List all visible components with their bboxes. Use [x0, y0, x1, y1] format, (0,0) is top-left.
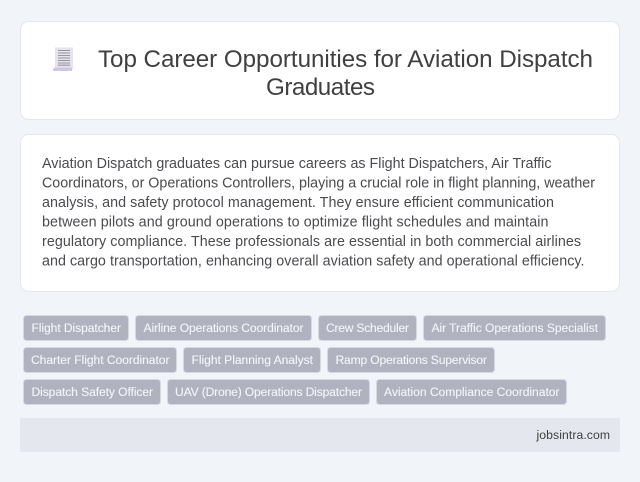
description text: between pilots and ground operations to optimize flight schedules and maintain	[42, 214, 549, 230]
title heading: Top Career Opportunities for Aviation Dispatch	[98, 46, 593, 73]
tag: Dispatch Safety Officer	[24, 380, 160, 404]
icon: document scroll	[53, 48, 73, 71]
tag: Airline Operations Coordinator	[136, 316, 312, 340]
tag: Flight Dispatcher: Flight Dispatcher	[32, 321, 121, 335]
description text: Coordinators, or Operations Controllers, playing a crucial role in flight planning, weather	[42, 176, 595, 192]
tag: Air Traffic Operations Specialist	[424, 316, 606, 340]
description text: Aviation Dispatch graduates can pursue careers as Flight Dispatchers, Air Traffic	[42, 156, 552, 172]
tag: Aviation Compliance Coordinator	[376, 380, 566, 404]
description text: regulatory compliance. These professionals are essential in both commercial airlines	[42, 234, 581, 250]
tag: Crew Scheduler: Crew Scheduler	[326, 321, 409, 335]
title heading: Graduates	[266, 74, 375, 101]
tag: Air Traffic Operations Specialist: Air Traffic Operations Specialist	[432, 321, 599, 335]
tag: Charter Flight Coordinator	[24, 348, 176, 372]
tag: UAV (Drone) Operations Dispatcher: UAV (Drone) Operations Dispatcher	[175, 385, 362, 399]
tag: Crew Scheduler	[318, 316, 416, 340]
tag: UAV (Drone) Operations Dispatcher	[168, 380, 370, 404]
tag: Airline Operations Coordinator: Airline Operations Coordinator	[144, 321, 304, 335]
footer source text: jobsintra.com	[536, 428, 610, 442]
tag: Ramp Operations Supervisor	[328, 348, 494, 372]
tag: Aviation Compliance Coordinator: Aviation Compliance Coordinator	[384, 385, 560, 399]
tag list	[24, 316, 606, 404]
description text: analysis, and safety protocol management. They ensure efficient communication	[42, 195, 554, 211]
description text: and cargo transportation, enhancing overall aviation safety and operational efficiency.	[42, 254, 584, 270]
tag: Charter Flight Coordinator: Charter Flight Coordinator	[31, 353, 170, 367]
panel: description card	[20, 134, 620, 292]
tag: Flight Dispatcher	[24, 316, 128, 340]
tag: Dispatch Safety Officer: Dispatch Safety Officer	[32, 385, 153, 399]
footer bar	[20, 418, 620, 452]
tag: Ramp Operations Supervisor: Ramp Operations Supervisor	[336, 353, 487, 367]
tag: Flight Planning Analyst	[184, 348, 320, 372]
tag: Flight Planning Analyst: Flight Planning Analyst	[192, 353, 314, 367]
panel: title card	[20, 22, 620, 120]
